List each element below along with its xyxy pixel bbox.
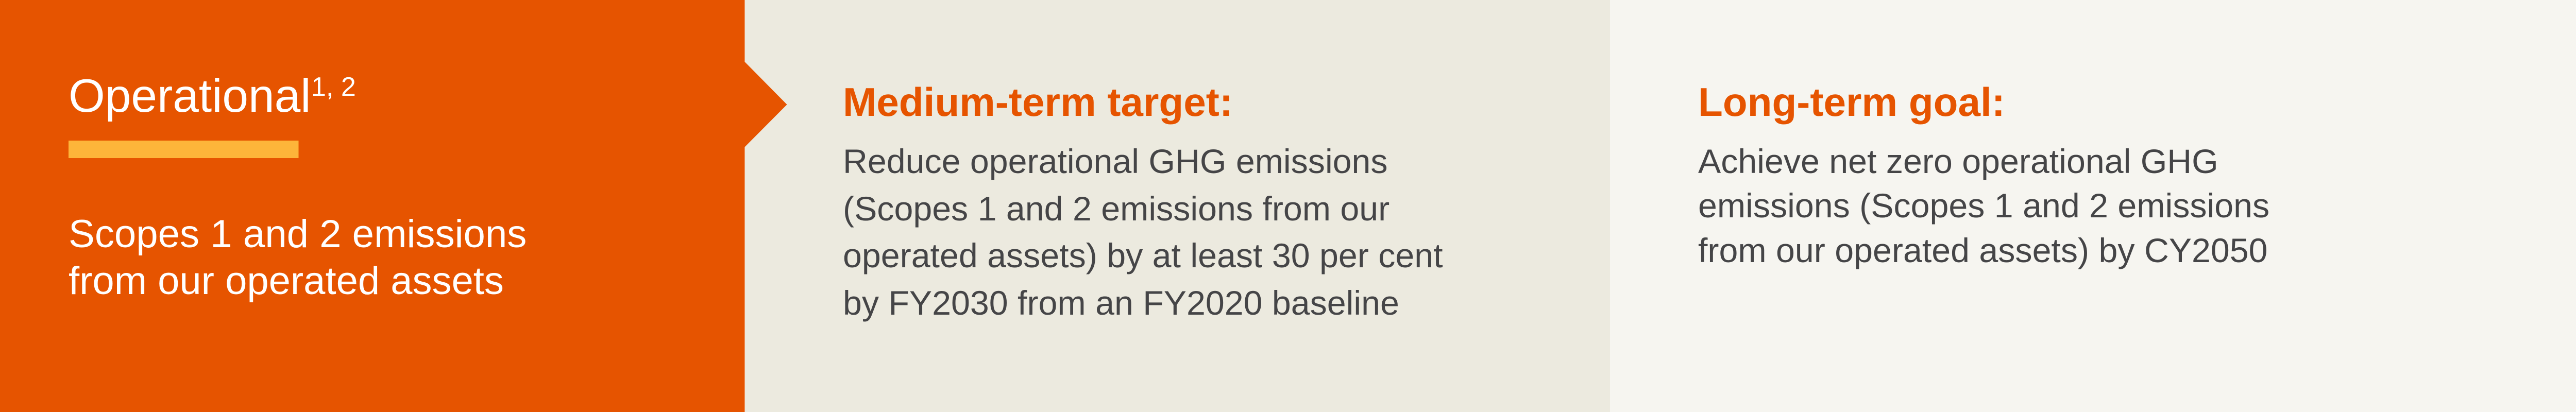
panel: medium-term target background [745,0,1610,412]
text: long-term description: Achieve net zero operational GHG [1698,143,2218,181]
text: medium-term description: by FY2030 from an FY2020 baseline [843,284,1399,322]
text: medium-term description: Reduce operational GHG emissions [843,143,1388,181]
heading: Operational: Operational [69,70,311,122]
text: medium-term description: operated assets) by at least 30 per cent [843,237,1443,275]
text: operational description: from our operated assets [69,259,504,303]
heading: medium-term target: Medium-term target: [843,79,1233,125]
text: operational description [69,212,527,303]
panel: long-term goal background [1610,0,2576,412]
text: long-term description [1698,143,2269,270]
panel: operational with arrow [0,0,787,412]
footnote markers: 1, 2 [311,72,356,102]
accent bar [69,141,299,158]
text: medium-term description: (Scopes 1 and 2 emissions from our [843,190,1389,228]
text: medium-term description [843,143,1443,322]
text: long-term description: from our operated assets) by CY2050 [1698,232,2268,270]
heading: long-term goal: Long-term goal: [1698,79,2005,125]
text: long-term description: emissions (Scopes 1 and 2 emissions [1698,187,2269,225]
text: operational description: Scopes 1 and 2 emissions [69,212,527,256]
